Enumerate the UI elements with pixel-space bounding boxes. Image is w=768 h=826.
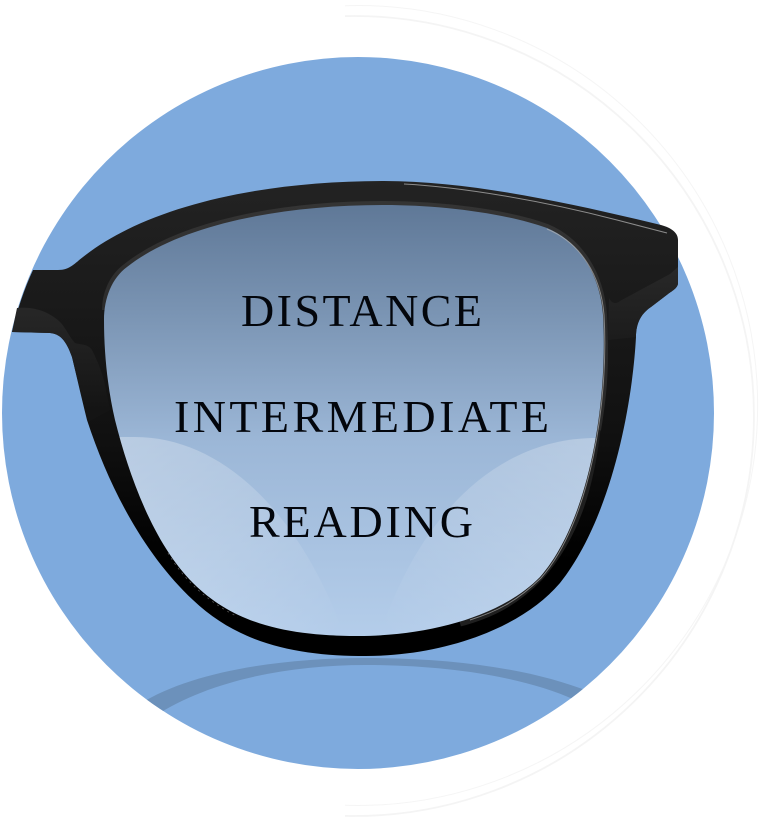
lens <box>100 205 610 640</box>
top edge specular highlight <box>404 184 667 233</box>
bridge lower shading <box>12 308 110 422</box>
lens lower left dotted glint <box>168 553 238 617</box>
label: reading zone: READING <box>249 496 473 547</box>
glasses reflection on surface <box>147 658 583 711</box>
inner rim lower right gloss <box>460 430 597 623</box>
lens right edge highlight <box>470 229 605 620</box>
label: distance zone: DISTANCE <box>241 285 482 336</box>
inner rim upper band <box>106 205 604 430</box>
left reading zone <box>120 437 300 618</box>
temple lower shading <box>608 267 678 340</box>
label: intermediate zone: INTERMEDIATE <box>174 391 549 442</box>
right reading zone <box>426 438 596 608</box>
glasses frame <box>12 181 678 656</box>
frame body <box>12 181 678 656</box>
blue background disc <box>2 57 714 769</box>
faint outer rings <box>345 5 758 816</box>
